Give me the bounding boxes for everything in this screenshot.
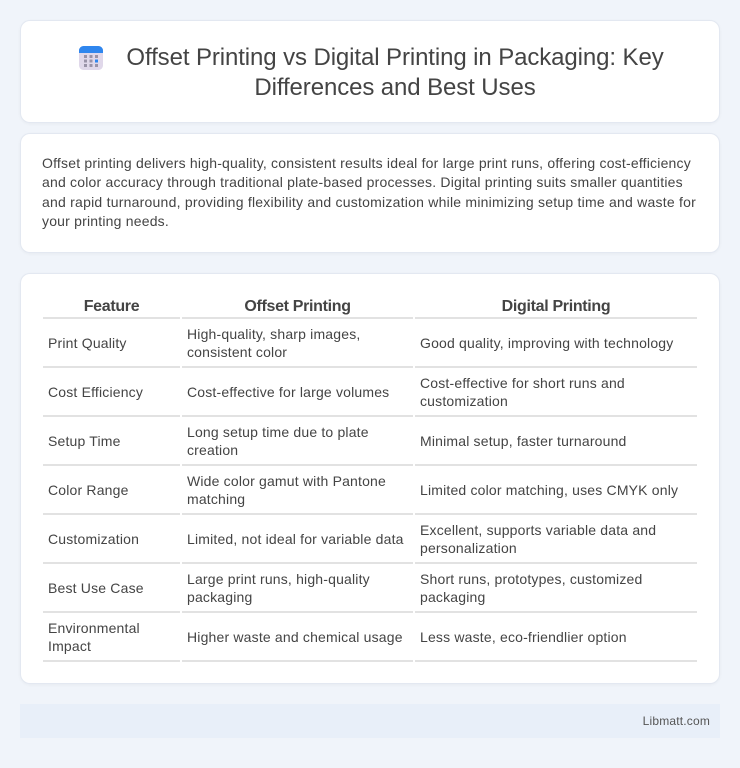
row 7: feature: Environmental	[48, 620, 140, 636]
footer credit: Libmatt.com	[643, 714, 710, 728]
row 2: digital: Cost-effective for short runs and	[420, 375, 625, 391]
row 3: digital: Minimal setup, faster turnaround	[420, 433, 627, 449]
row 3: offset: creation	[187, 442, 238, 458]
row 6: digital: packaging	[420, 589, 485, 605]
panel: comparison table card	[20, 273, 720, 684]
panel: intro card	[20, 133, 720, 253]
row 4: offset: matching	[187, 491, 245, 507]
row 4: offset: Wide color gamut with Pantone	[187, 473, 386, 489]
footer bar	[20, 704, 720, 738]
row 5: feature: Customization	[48, 531, 139, 547]
intro paragraph: Offset printing delivers high-quality, consistent results ideal for large print runs, offering cost-efficiency	[42, 154, 691, 170]
row 7: digital: Less waste, eco-friendlier option	[420, 629, 627, 645]
row 3: offset: Long setup time due to plate	[187, 424, 369, 440]
title	[126, 44, 664, 101]
row 6: offset: packaging	[187, 589, 252, 605]
row 3: offset	[187, 424, 369, 458]
table header: Offset Printing: Offset Printing	[244, 298, 351, 315]
row 3: feature: Setup Time	[48, 433, 121, 449]
row 6: digital	[420, 571, 642, 605]
title: Offset Printing vs Digital Printing in Packaging: Key	[126, 44, 664, 71]
row 1: offset: consistent color	[187, 344, 287, 360]
row 6: feature: Best Use Case	[48, 580, 144, 596]
row 6: digital: Short runs, prototypes, customized	[420, 571, 642, 587]
row 5: digital: personalization	[420, 540, 517, 556]
row 5: offset: Limited, not ideal for variable data	[187, 531, 404, 547]
intro paragraph: and rapid turnaround, providing flexibility and customization while minimizing setup time and waste for	[42, 194, 696, 210]
row 7: offset: Higher waste and chemical usage	[187, 629, 403, 645]
intro paragraph: and color accuracy through traditional plate-based processes. Digital printing suits smaller quantities	[42, 174, 683, 190]
row 2: digital: customization	[420, 393, 508, 409]
row 1: offset	[187, 326, 360, 360]
row 4: offset	[187, 473, 386, 507]
row 1: digital: Good quality, improving with technology	[420, 335, 673, 351]
row 4: digital: Limited color matching, uses CMYK only	[420, 482, 678, 498]
icon: calendar	[79, 46, 103, 70]
table header: Feature: Feature	[84, 298, 139, 315]
table header: Digital Printing: Digital Printing	[502, 298, 610, 315]
panel: title card	[20, 20, 720, 123]
intro paragraph: your printing needs.	[42, 213, 169, 229]
row 4: feature: Color Range	[48, 482, 129, 498]
title: Differences and Best Uses	[254, 74, 536, 101]
row 1: offset: High-quality, sharp images,	[187, 326, 360, 342]
row 6: offset: Large print runs, high-quality	[187, 571, 370, 587]
row 2: offset: Cost-effective for large volumes	[187, 384, 389, 400]
row 5: digital: Excellent, supports variable data and	[420, 522, 656, 538]
row 7: feature: Impact	[48, 638, 91, 654]
intro paragraph	[42, 154, 696, 229]
row 5: digital	[420, 522, 656, 556]
row 2: digital	[420, 375, 625, 409]
row 7: feature	[48, 620, 140, 654]
row 6: offset	[187, 571, 370, 605]
row 2: feature: Cost Efficiency	[48, 384, 143, 400]
row 1: feature: Print Quality	[48, 335, 127, 351]
